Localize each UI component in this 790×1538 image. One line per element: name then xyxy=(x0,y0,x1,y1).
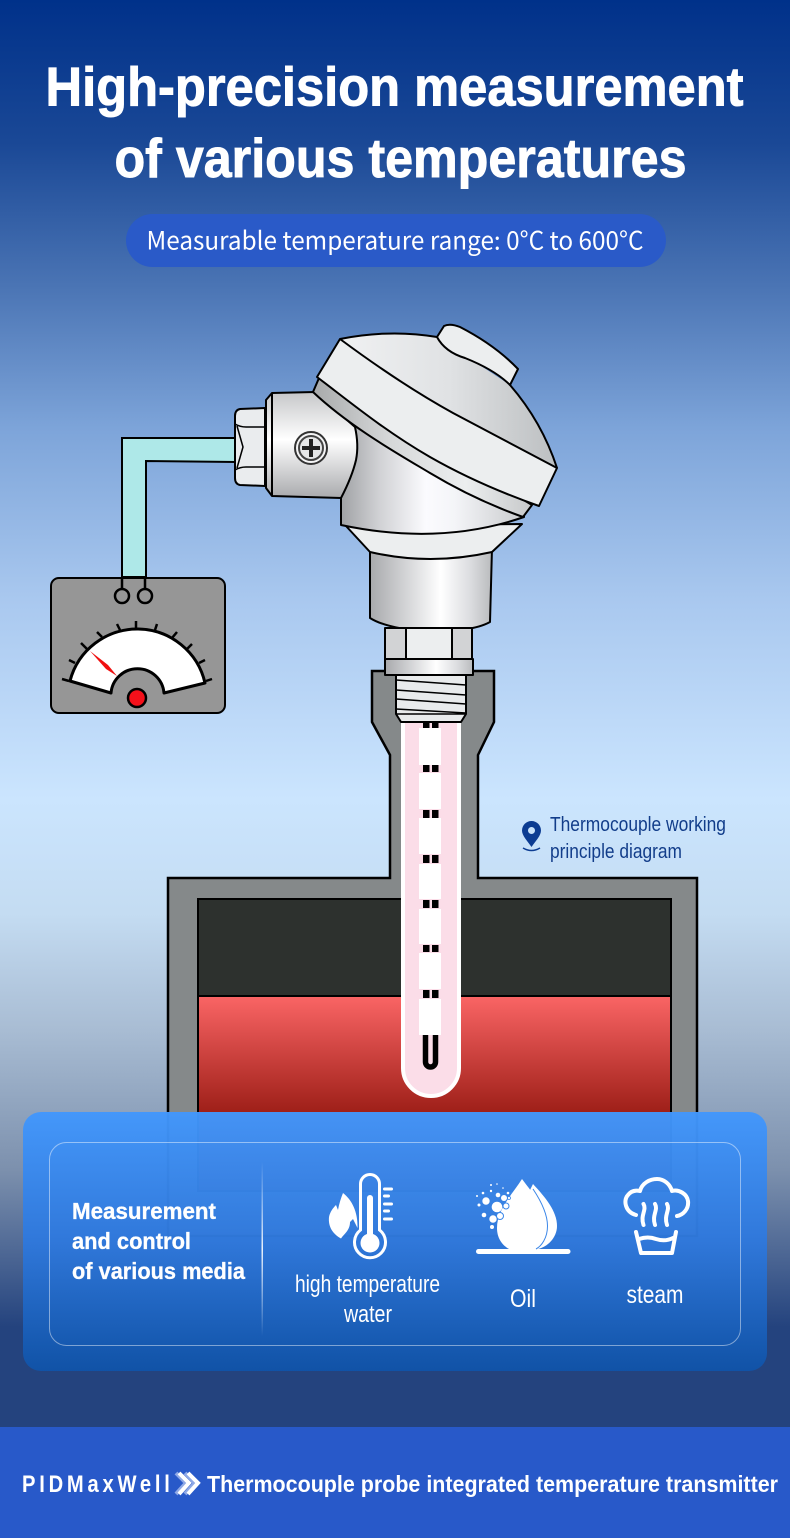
wire segments xyxy=(423,721,438,998)
lower neck xyxy=(370,548,492,631)
main body xyxy=(341,420,524,534)
signal cable xyxy=(122,438,236,577)
label: steam: steam xyxy=(626,1281,684,1309)
heated medium xyxy=(198,996,671,1191)
diagram caption: principle diagram xyxy=(550,841,682,863)
terminals xyxy=(115,577,152,603)
icon: steam bowl xyxy=(625,1179,688,1253)
title xyxy=(46,56,744,189)
label: high temperature water: high temperature xyxy=(295,1271,440,1298)
hex fitting xyxy=(385,628,472,660)
panel heading: of various media xyxy=(72,1258,245,1284)
diagram caption: Thermocouple working xyxy=(550,814,726,836)
icon: double chevron xyxy=(176,1473,198,1494)
transmitter head xyxy=(235,325,557,722)
icon: thermometer with flame xyxy=(329,1174,393,1258)
needle xyxy=(90,651,117,676)
title: of various temperatures xyxy=(114,127,686,189)
panel heading: and control xyxy=(72,1228,191,1254)
collar xyxy=(385,659,473,675)
lid band xyxy=(317,339,557,506)
diagram caption xyxy=(522,814,726,863)
wire insulation xyxy=(419,728,441,1035)
threaded stem xyxy=(396,675,466,722)
body skirt xyxy=(346,524,522,559)
temperature range pill xyxy=(126,214,666,267)
lid dome xyxy=(340,333,557,468)
dial ticks xyxy=(62,621,212,681)
gauge meter xyxy=(51,577,225,713)
label: high temperature water: water xyxy=(343,1301,392,1328)
temperature range pill: Measurable temperature range: 0°C to 600°C xyxy=(146,222,644,258)
footer bar xyxy=(0,1427,790,1538)
gauge knob xyxy=(128,689,146,707)
cable nut xyxy=(235,408,265,486)
lid tab xyxy=(437,325,518,385)
thermowell vessel xyxy=(168,671,697,1236)
thermocouple tube xyxy=(403,720,459,1096)
label: oil: Oil xyxy=(510,1285,536,1313)
terminal screw xyxy=(295,432,327,464)
panel heading: Measurement xyxy=(72,1198,216,1224)
icon: oil drop xyxy=(476,1179,570,1254)
panel heading xyxy=(72,1198,245,1284)
panel: measured media xyxy=(23,1112,767,1371)
lid strip xyxy=(313,378,532,517)
title: High-precision measurement xyxy=(46,56,744,118)
side elbow xyxy=(266,392,357,498)
vessel headspace xyxy=(198,899,671,996)
thermocouple junction xyxy=(426,1035,436,1067)
icon: location pin xyxy=(522,821,541,850)
label: high temperature water xyxy=(295,1271,440,1328)
brand name: PIDMaxWell xyxy=(22,1470,170,1497)
dial face xyxy=(70,629,205,693)
